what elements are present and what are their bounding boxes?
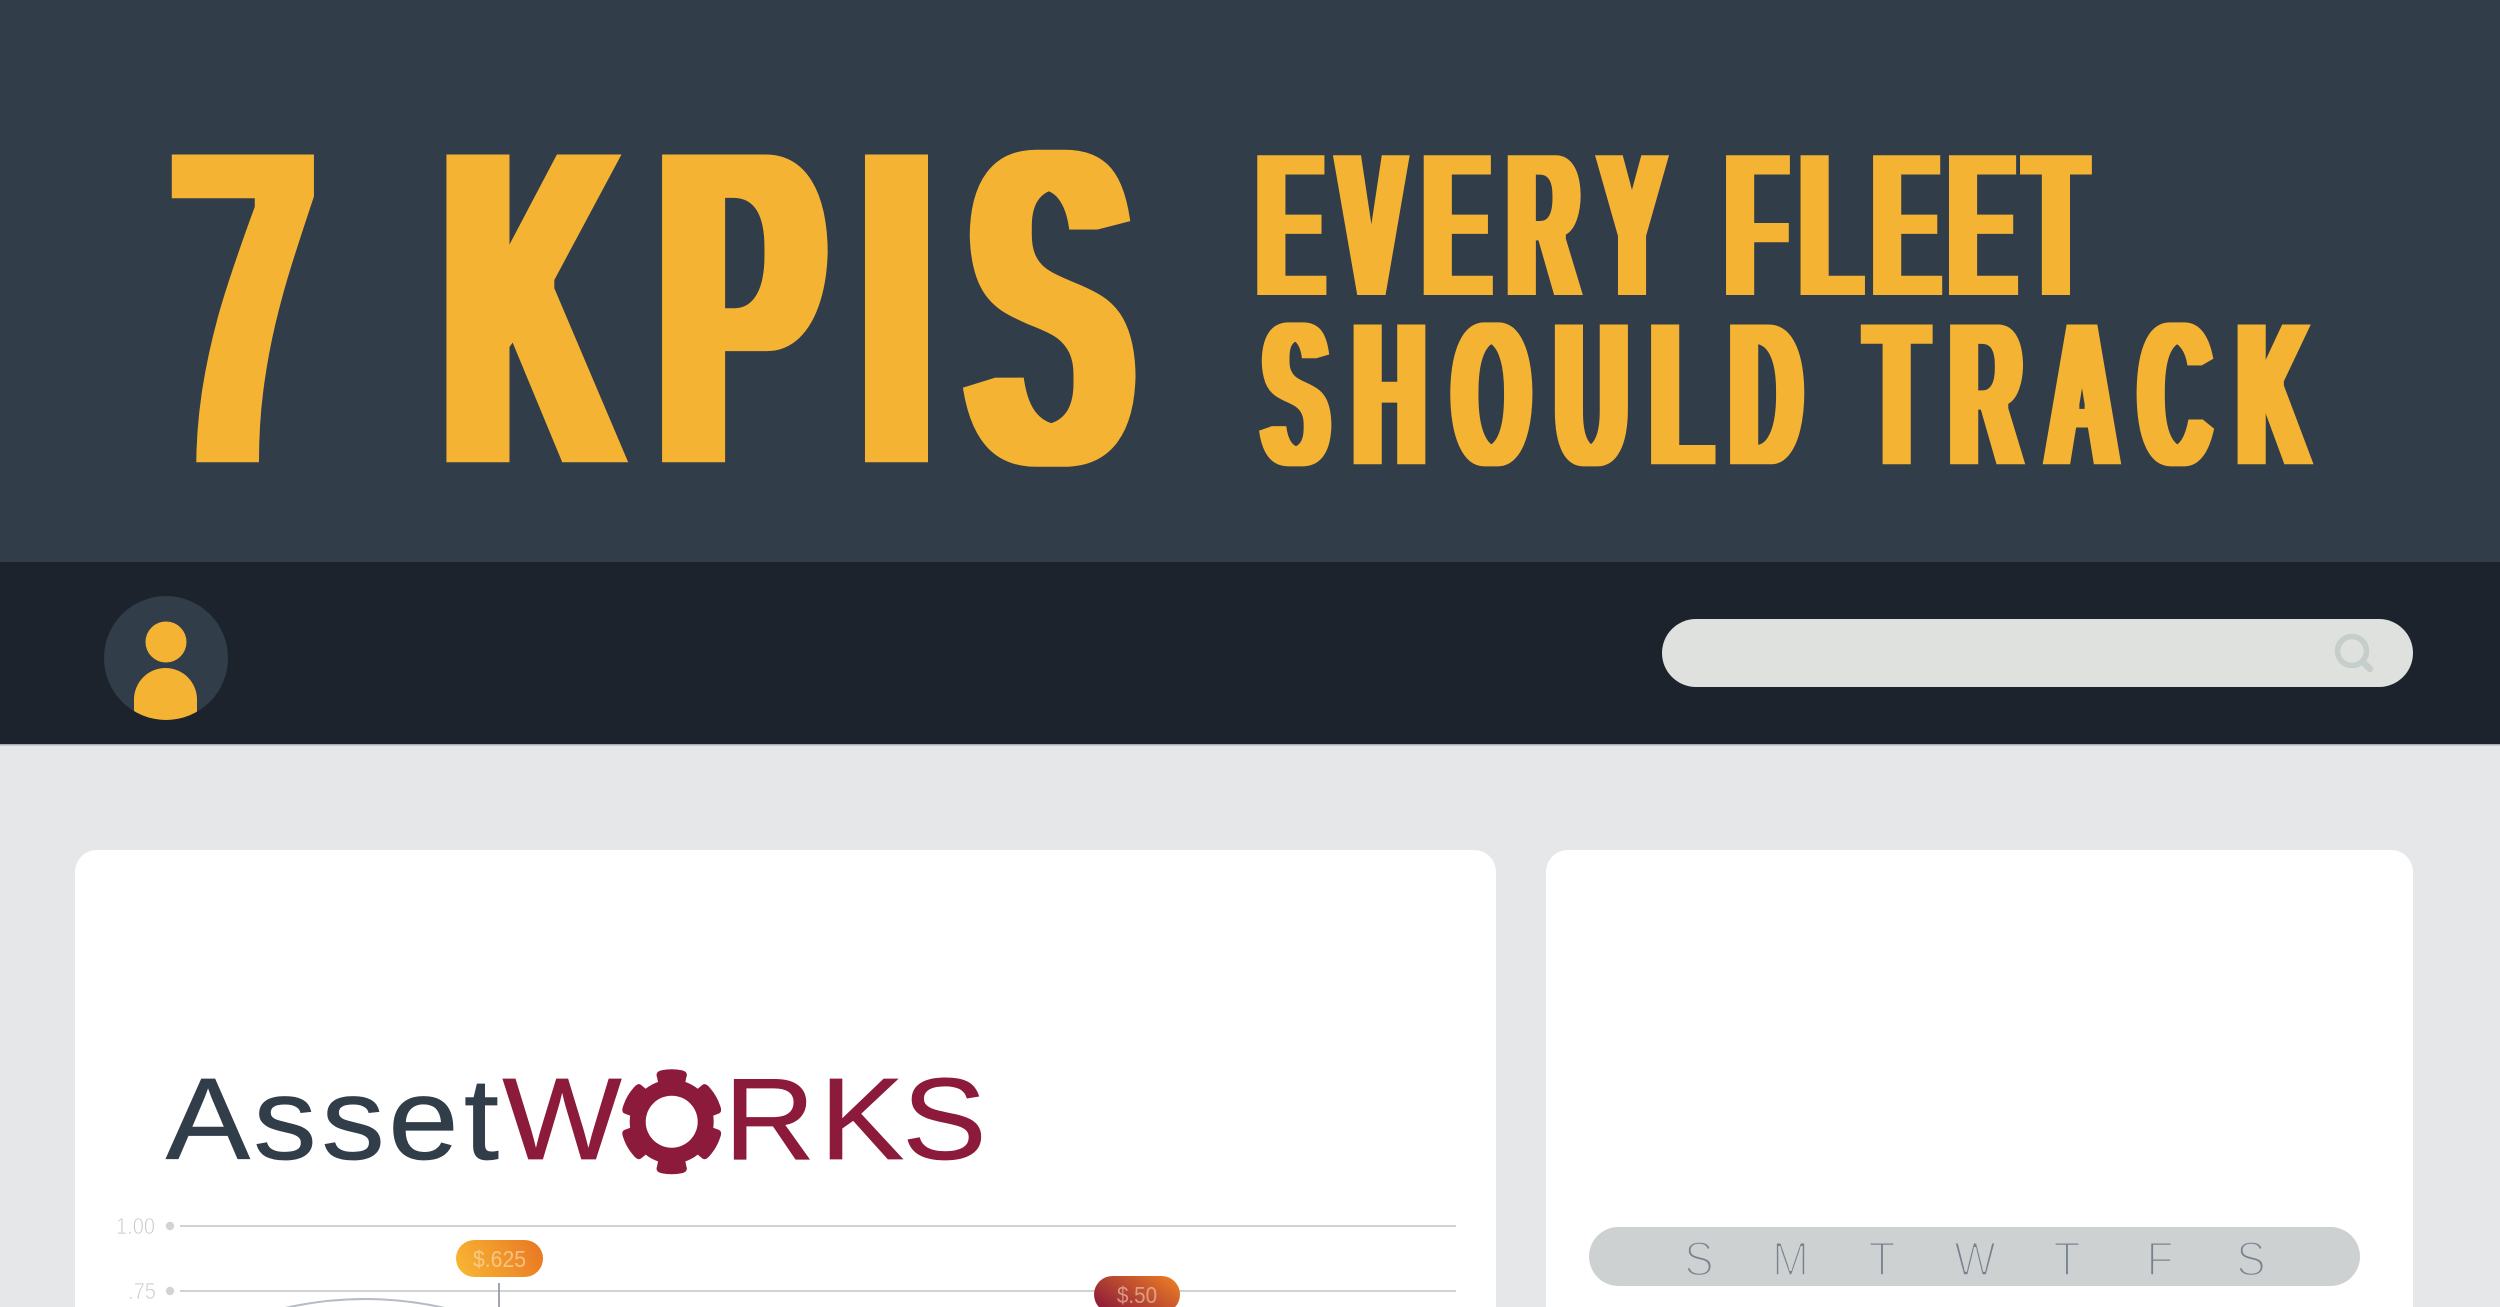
panel: chart card <box>75 850 1496 1307</box>
chart curve <box>285 1299 445 1307</box>
value pill $.625 <box>456 1240 543 1277</box>
weekday labels: SMTWTFS <box>1684 1232 2266 1286</box>
title: subhead: EVERY FLEET <box>1258 108 2086 342</box>
panel: calendar card <box>1546 850 2413 1307</box>
title <box>175 50 2309 564</box>
AssetWorks logo: AssetWORKS <box>166 1054 987 1184</box>
icon: magnifying glass <box>2338 636 2370 669</box>
navigation bar <box>0 562 2500 746</box>
header band <box>0 0 2500 562</box>
title: large headline: 7 KPIS <box>175 50 1131 564</box>
value pill $.625: $.625 <box>473 1246 526 1272</box>
title: subhead <box>1258 108 2309 511</box>
title: subhead: SHOULD TRACK <box>1263 277 2309 511</box>
icon: gear <box>619 1069 724 1174</box>
chart axis row .75 <box>128 1278 1456 1304</box>
chart axis row .75: .75 <box>128 1278 156 1304</box>
chart axis row 1.00 <box>116 1213 1456 1239</box>
search bar <box>1662 619 2413 687</box>
value pill $.50 <box>1094 1276 1180 1307</box>
chart axis row 1.00: 1.00 <box>116 1213 155 1239</box>
line chart <box>116 1213 1456 1307</box>
icon: user avatar <box>104 596 228 730</box>
weekday bar <box>1589 1227 2360 1286</box>
marker line <box>498 1283 500 1307</box>
